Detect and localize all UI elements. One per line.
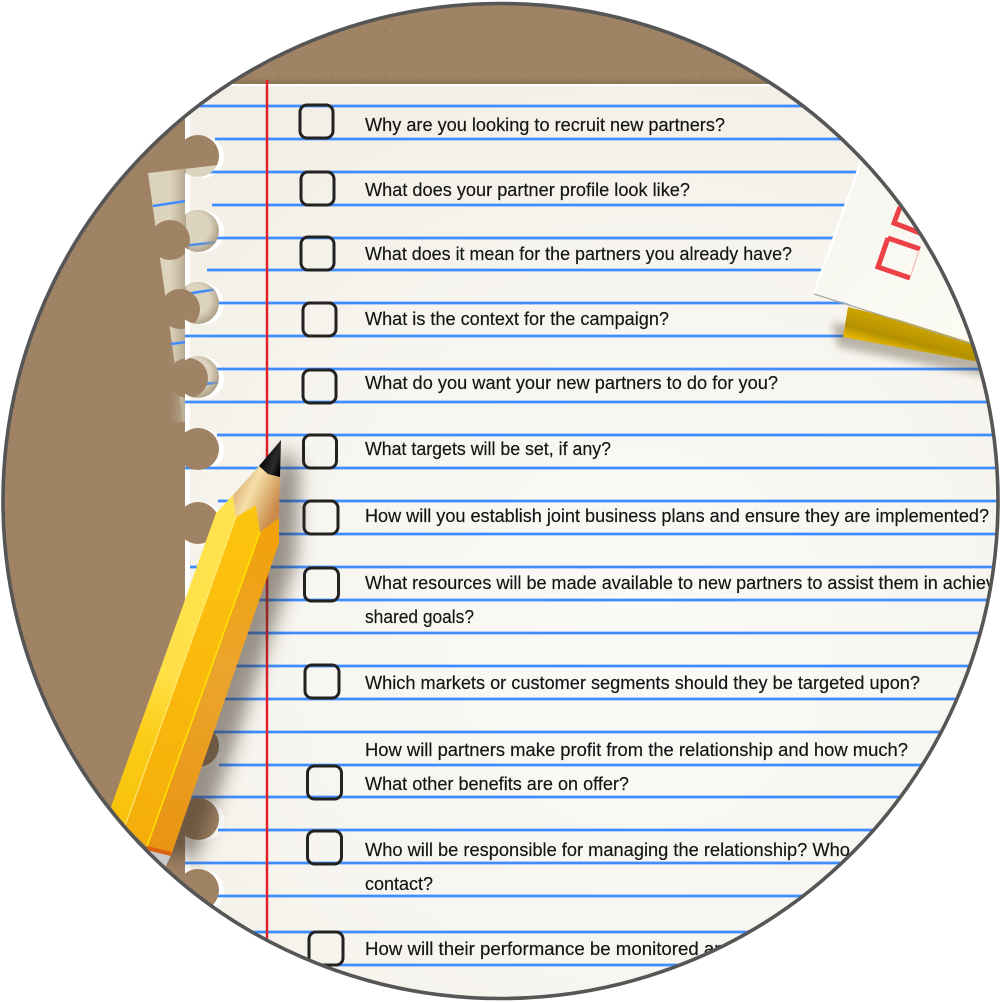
yellow tab bbox=[843, 307, 976, 362]
sticky note with red checkboxes bbox=[813, 162, 981, 380]
ferrule end bbox=[149, 850, 172, 866]
barrel: left facet bbox=[111, 495, 236, 826]
red box, upper bbox=[890, 206, 919, 236]
checklist questions: What do you want your new partners to do for you? bbox=[365, 372, 778, 393]
paper sheet bbox=[185, 84, 772, 874]
white crescents around punched holes bbox=[198, 136, 224, 907]
checklist questions: Why are you looking to recruit new partners? bbox=[365, 114, 725, 135]
hole edge shading bbox=[188, 210, 219, 398]
blue ruled lines bbox=[185, 106, 1001, 965]
cover tabs showing through the stub bbox=[148, 165, 217, 398]
checklist questions: What other benefits are on offer? bbox=[365, 773, 629, 794]
barrel: right facet bbox=[147, 518, 279, 853]
checklist questions: How will partners make profit from the relationship and how much? bbox=[365, 739, 908, 760]
checklist questions: How will you establish joint business plans and ensure they are implemented? bbox=[365, 505, 989, 526]
wood cone bbox=[233, 466, 280, 532]
checklist questions: shared goals? bbox=[365, 606, 474, 627]
torn paper stub behind the page bbox=[148, 165, 219, 422]
checkboxes bbox=[300, 105, 343, 965]
red margin line bbox=[266, 80, 268, 1003]
checklist questions: What does your partner profile look like? bbox=[365, 179, 690, 200]
notebook cover: brown textured background bbox=[4, 5, 768, 905]
red box, lower bbox=[878, 238, 920, 278]
sheet of lined paper bbox=[182, 81, 1001, 1003]
note paper bbox=[823, 170, 970, 342]
pencil shadow bbox=[150, 445, 300, 860]
checklist questions: What targets will be set, if any? bbox=[365, 438, 611, 459]
pencil bbox=[111, 440, 300, 868]
checklist questions: Which markets or customer segments should they be targeted upon? bbox=[365, 672, 920, 693]
checklist questions: Who will be responsible for managing the relationship? Who can they bbox=[365, 839, 925, 860]
note shadow bbox=[832, 322, 985, 376]
checklist questions: contact? bbox=[365, 873, 433, 894]
top edge shadow bbox=[233, 80, 768, 84]
checklist questions: How will their performance be monitored and bbox=[365, 938, 735, 959]
checklist questions bbox=[365, 114, 1001, 959]
checklist questions: What is the context for the campaign? bbox=[365, 308, 669, 329]
barrel: middle facet bbox=[125, 505, 260, 847]
graphite tip bbox=[259, 440, 281, 477]
checklist questions: What does it mean for the partners you already have? bbox=[365, 243, 792, 264]
